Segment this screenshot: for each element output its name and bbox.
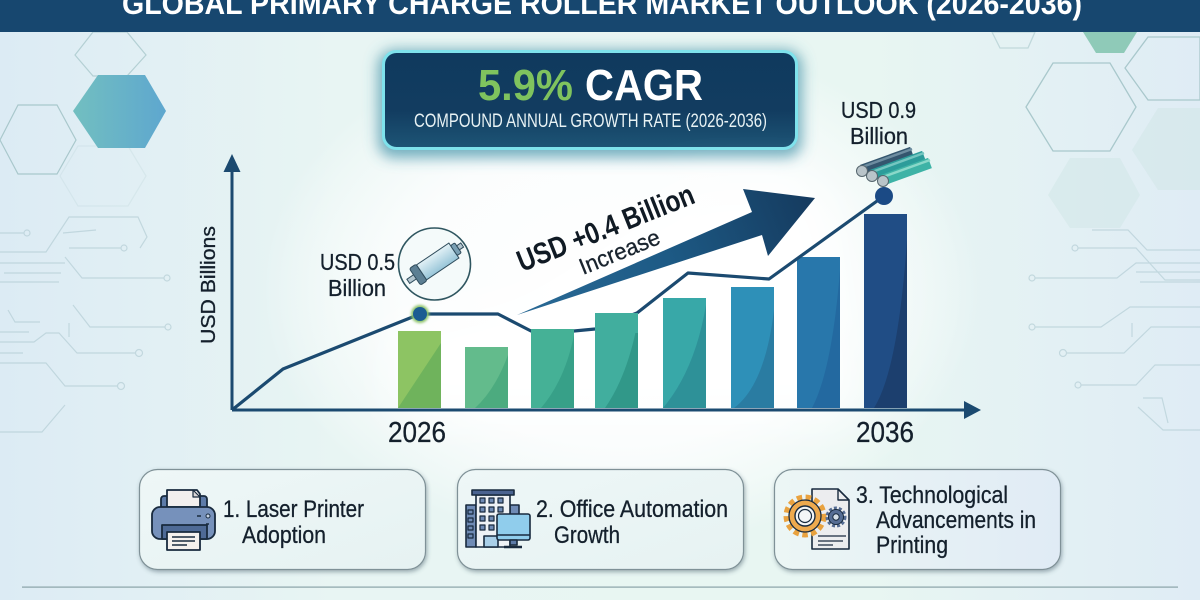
CAGR value: 5.9% — [478, 61, 573, 110]
x axis label 2036: 2036 — [856, 417, 914, 449]
card 2 text: 2. Office Automation — [536, 496, 728, 523]
label 2036 value: USD 0.9 — [841, 97, 916, 123]
increase sublabel: Increase — [575, 224, 664, 280]
axes — [224, 154, 981, 419]
card 3 text: Printing — [876, 532, 948, 559]
icon: single roller in circle — [398, 228, 470, 300]
card: technological advancements in printing — [774, 470, 1060, 570]
card: office automation growth — [458, 470, 744, 570]
data point 2036 — [875, 187, 893, 205]
label 2026 value: Billion — [328, 275, 386, 301]
circuit lines left — [0, 217, 171, 432]
background hexagon decoration left — [0, 32, 166, 206]
circuit lines right — [1029, 230, 1200, 430]
header bar — [0, 0, 1200, 32]
trend line — [232, 196, 884, 410]
icon: gears and document — [786, 489, 849, 549]
x axis label 2026: 2026 — [388, 417, 446, 449]
y axis title: USD Billions — [198, 226, 220, 344]
increase arrow — [517, 189, 815, 315]
CAGR subtitle: COMPOUND ANNUAL GROWTH RATE (2026-2036) — [414, 111, 767, 132]
card 3 text: 3. Technological — [856, 482, 1008, 509]
chart — [198, 97, 981, 449]
icon: three rollers — [856, 149, 930, 186]
increase label: USD +0.4 Billion — [512, 178, 699, 279]
card 1 text: 1. Laser Printer — [223, 496, 364, 523]
card 3 text: Advancements in — [876, 507, 1036, 534]
data point 2026 — [411, 305, 429, 323]
icon: printer — [152, 490, 215, 550]
card 1 text: Adoption — [242, 522, 326, 549]
CAGR callout — [378, 50, 802, 158]
card 2 text: Growth — [554, 522, 620, 549]
bars over line — [531, 313, 638, 335]
icon: office building and monitor — [466, 490, 530, 547]
background hexagon decoration right — [992, 32, 1200, 228]
chart white glow — [400, 190, 850, 410]
bars — [398, 214, 907, 408]
label 2026 value: USD 0.5 — [320, 249, 395, 275]
card: laser printer adoption — [140, 470, 426, 570]
CAGR label: CAGR — [585, 61, 703, 110]
label 2036 value: Billion — [850, 123, 908, 149]
